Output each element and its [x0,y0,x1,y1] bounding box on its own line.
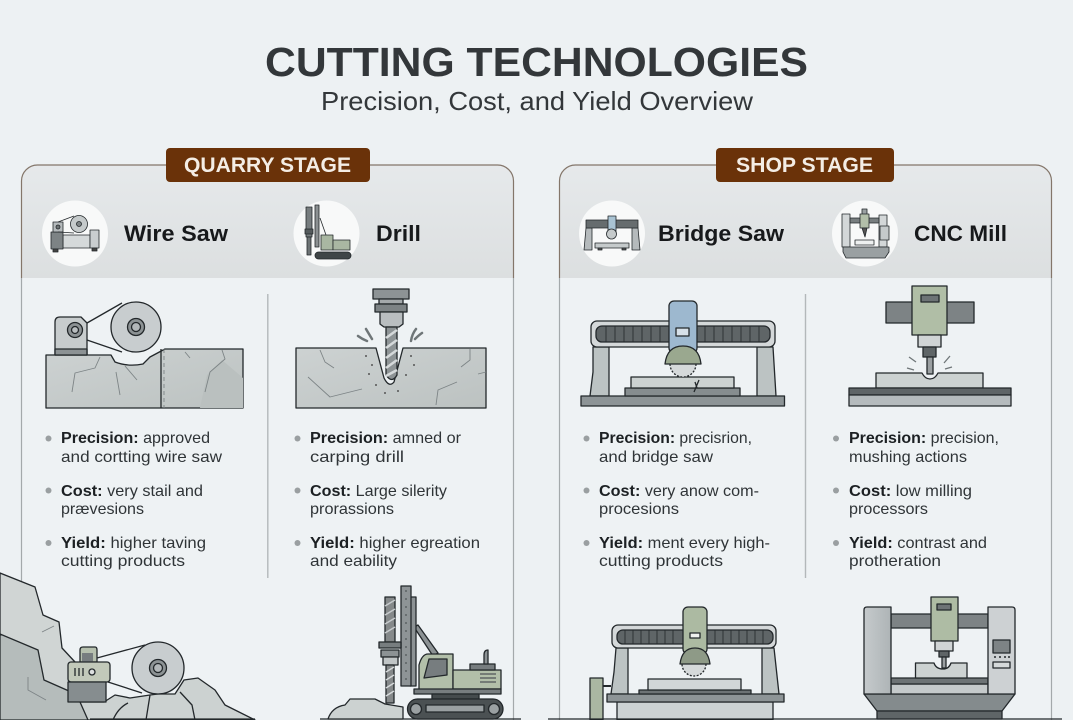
bullets: cnc mill: processors [849,501,928,518]
bullets: wire saw [46,430,223,570]
illustration: bridge saw [581,301,784,406]
label: cnc mill: CNC Mill [914,221,1007,246]
bullets: bridge saw: Cost: very anow com- [599,483,759,500]
bullets: drill: and eability [310,553,397,570]
illustration: wire saw cutting block [46,302,243,408]
bullets: drill: Precision: amned or [310,430,461,447]
panel: shop stage [548,148,1062,720]
label: bridge saw: Bridge Saw [658,221,785,246]
label: drill: Drill [376,221,421,246]
icon: wire saw [42,200,108,266]
bullets: drill: Yield: higher egreation [310,535,480,552]
bullets: wire saw: cutting products [61,553,185,570]
bullets: bridge saw [584,430,770,570]
bullets: wire saw: Yield: higher taving [61,535,206,552]
bullets: wire saw: Cost: very stail and [61,483,203,500]
scene: quarry drill rig [320,586,521,719]
icon: cnc mill [832,200,898,266]
title: CUTTING TECHNOLOGIES [265,39,808,85]
bullets: bridge saw: cutting products [599,553,723,570]
badge: quarry stage [166,148,370,182]
bullets: cnc mill: Cost: low milling [849,483,972,500]
bullets: drill: prorassions [310,501,394,518]
bullets: bridge saw: procesions [599,501,679,518]
bullets: bridge saw: and bridge saw [599,449,714,466]
illustration: drill bit in rock [296,289,486,408]
bullets: drill: Cost: Large silerity [310,483,447,500]
panel: quarry stage [0,148,521,720]
badge: quarry stage: QUARRY STAGE [184,154,351,177]
bullets: drill [294,430,480,570]
badge: shop stage [716,148,894,182]
bullets: drill: carping drill [310,449,404,466]
bullets: wire saw: and cortting wire saw [61,449,223,466]
label: wire saw: Wire Saw [124,221,229,246]
icon: bridge saw [579,200,645,266]
bullets: bridge saw: Yield: ment every high- [599,535,770,552]
scene: shop cnc machine [864,597,1015,719]
bullets: cnc mill: protheration [849,553,941,570]
icon: drill rig [294,200,360,266]
badge: shop stage: SHOP STAGE [736,154,873,177]
scene: shop bridge saw [548,607,1062,720]
bullets: bridge saw: Precision: precisrion, [599,430,752,447]
subtitle: Precision, Cost, and Yield Overview [321,86,753,116]
scene: quarry wire saw [0,573,255,720]
bullets: wire saw: Precision: approved [61,430,210,447]
illustration: cnc spindle [849,286,1011,406]
bullets: wire saw: prævesions [61,501,144,518]
bullets: cnc mill: Yield: contrast and [849,535,987,552]
bullets: cnc mill: Precision: precision, [849,430,999,447]
bullets: cnc mill [833,430,999,570]
bullets: cnc mill: mushing actions [849,449,967,466]
